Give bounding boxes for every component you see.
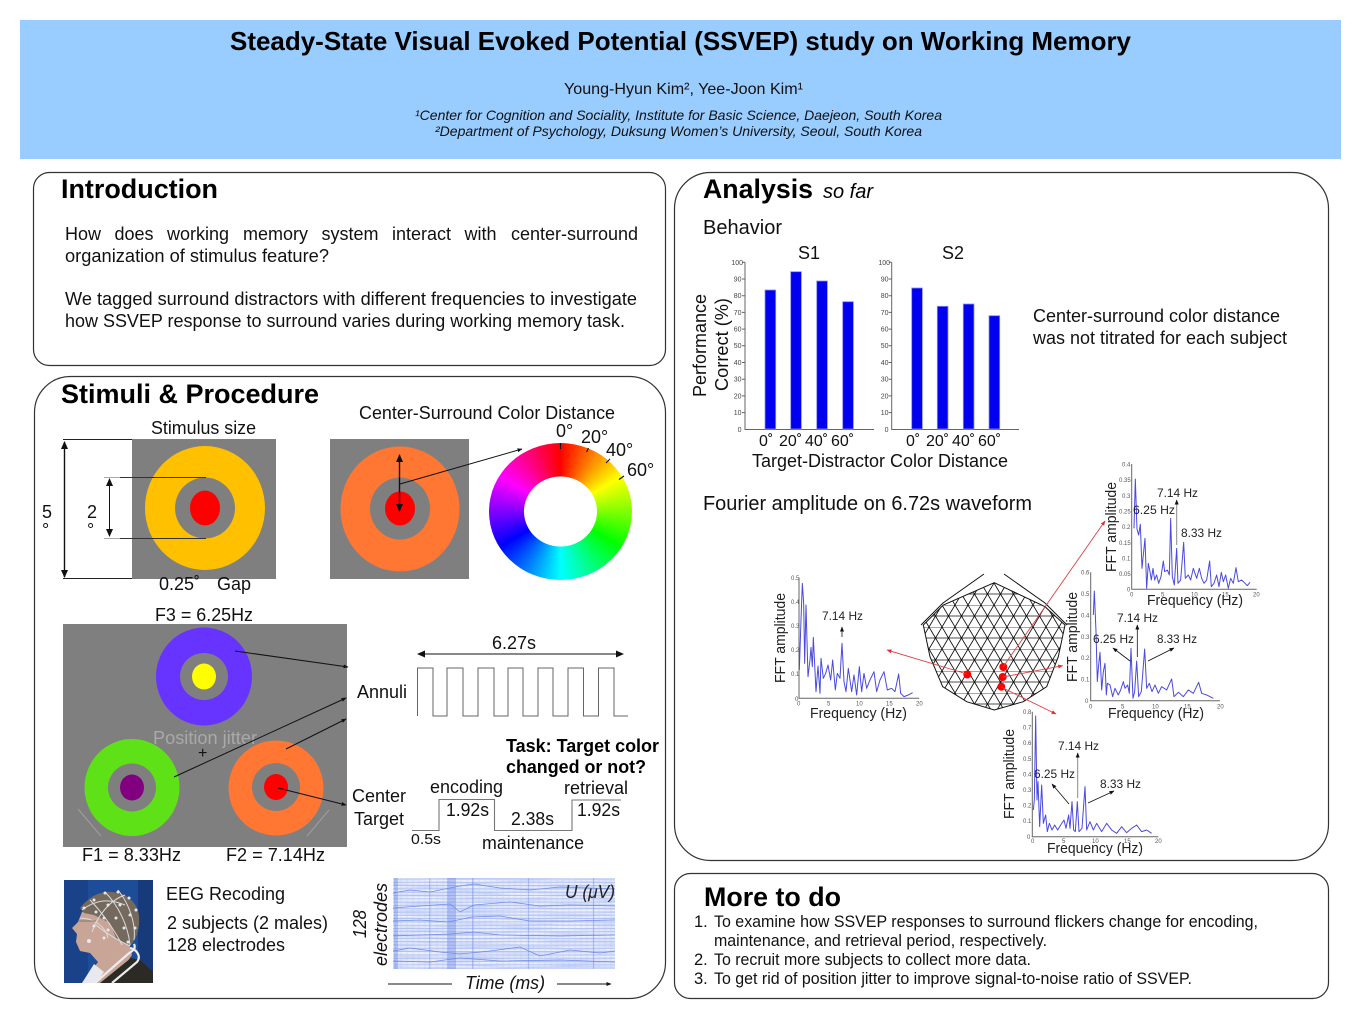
- stimulus size diagram: °: [42, 520, 49, 540]
- chart: FFT right electrode: 8.33 Hz: [1157, 632, 1197, 646]
- bar chart: S1: 0: [738, 427, 742, 434]
- stimulus size diagram: Gap: [217, 574, 251, 594]
- bar chart: S2: S2: [942, 243, 964, 263]
- annuli flicker timing: Annuli: [357, 682, 407, 702]
- chart: FFT lower right electrode: 5: [1062, 839, 1066, 845]
- bar chart: S2: 10: [881, 410, 889, 417]
- chart: FFT upper right electrode: 15: [1222, 592, 1229, 598]
- chart: FFT lower right electrode: 0.5: [1023, 757, 1032, 763]
- chart: FFT right electrode: 0: [1085, 699, 1089, 705]
- three-stimulus display: +: [198, 745, 207, 762]
- chart: FFT right electrode: 0.5: [1081, 592, 1090, 598]
- intro method line 2: how SSVEP response to surround varies during working memory task.: [65, 311, 625, 331]
- three-stimulus display: [63, 605, 348, 865]
- heading: introduction: Introduction: [61, 174, 218, 204]
- behavior note: was not titrated for each subject: [1032, 328, 1287, 348]
- chart: FFT lower right electrode: 0: [1031, 839, 1035, 845]
- EEG traces chart: U (μV): [565, 882, 615, 902]
- photo: participant wearing EEG net: [64, 880, 153, 983]
- panel: analysis: [674, 172, 1328, 860]
- annuli flicker timing: 6.27s: [492, 633, 536, 653]
- authors: Young-Hyun Kim², Yee-Joon Kim¹: [564, 81, 803, 98]
- chart: FFT upper right electrode: FFT amplitude: [1104, 482, 1120, 572]
- chart: FFT lower right electrode: 0: [1027, 835, 1031, 841]
- bar chart: S1: 20: [734, 394, 742, 400]
- panel: more to do: [674, 874, 1328, 998]
- task question: changed or not?: [506, 757, 646, 777]
- chart: FFT lower right electrode: 0.8: [1023, 710, 1032, 716]
- y-axis label: performance: Correct (%): [712, 298, 732, 391]
- numbered list: maintenance, and retrieval period, respectively.: [714, 932, 1047, 950]
- chart: FFT upper right electrode: 8.33 Hz: [1181, 526, 1222, 540]
- stimulus size diagram: 2: [87, 502, 97, 522]
- chart: FFT left electrode: 7.14 Hz: [822, 609, 863, 623]
- bar chart: S1: 30: [734, 376, 742, 384]
- y-axis label: performance: Performance: [690, 294, 710, 397]
- bar chart: S1: 80: [734, 293, 742, 300]
- chart: FFT lower right electrode: [1002, 710, 1162, 857]
- intro question text: system: [322, 224, 379, 244]
- center-surround colour distance stimulus: [330, 403, 615, 579]
- chart: FFT left electrode: 0: [797, 702, 801, 708]
- center target timing: Center: [352, 786, 406, 806]
- bar chart: S2: 20: [881, 394, 889, 400]
- chart: FFT right electrode: FFT amplitude: [1065, 592, 1081, 682]
- bar chart: S1: 100: [731, 260, 743, 267]
- bar chart: S2: 60: [881, 326, 889, 334]
- chart: FFT right electrode: 20: [1217, 704, 1224, 710]
- bar chart: S2: 80: [881, 293, 889, 300]
- center target timing: Target: [354, 809, 404, 829]
- intro question second line: organization of stimulus feature?: [65, 246, 329, 266]
- chart: FFT right electrode: 0.3: [1081, 635, 1090, 641]
- bar chart: S2: 50: [881, 343, 889, 350]
- bar chart: S1: [731, 243, 874, 450]
- electrode head map: [887, 521, 1105, 714]
- chart: FFT left electrode: 0.5: [791, 576, 800, 582]
- center target timing: maintenance: [482, 833, 584, 853]
- bar chart: S1: 40˚: [805, 433, 828, 450]
- chart: FFT right electrode: 15: [1184, 704, 1191, 710]
- chart: FFT left electrode: 5: [827, 702, 831, 708]
- chart: FFT lower right electrode: 15: [1124, 839, 1131, 845]
- chart: FFT upper right electrode: 0: [1127, 588, 1131, 594]
- bar chart: S1: 70: [734, 310, 742, 317]
- task question: Task: Target color: [506, 736, 659, 756]
- panel: stimuli and procedure: [34, 376, 666, 998]
- EEG recording text: EEG Recoding: [166, 884, 285, 904]
- chart: FFT lower right electrode: 6.25 Hz: [1034, 767, 1075, 781]
- affiliation 1: ¹Center for Cognition and Sociality, Institute for Basic Science, Daejeon, South Korea: [415, 107, 942, 123]
- chart: FFT lower right electrode: 8.33 Hz: [1100, 777, 1141, 791]
- chart: FFT left electrode: 0.2: [791, 648, 800, 654]
- chart: FFT upper right electrode: 0.4: [1122, 462, 1131, 468]
- EEG traces chart: 128: [350, 910, 370, 938]
- center-surround colour distance stimulus: Center-Surround Color Distance: [359, 403, 615, 423]
- bar chart: S2: 30: [881, 376, 889, 384]
- numbered list: [694, 913, 1258, 988]
- intro question text: with: [464, 224, 497, 244]
- chart: FFT upper right electrode: 0.25: [1119, 510, 1131, 516]
- bar chart: S2: 100: [878, 260, 890, 267]
- numbered list: 1.: [694, 913, 708, 931]
- chart: FFT upper right electrode: 0.35: [1119, 478, 1131, 484]
- x-axis label: colour distance: Target-Distractor Color Distance: [752, 451, 1008, 471]
- center target timing: 0.5s: [411, 831, 441, 848]
- chart: FFT right electrode: 6.25 Hz: [1093, 632, 1134, 646]
- chart: FFT upper right electrode: 0.2: [1122, 525, 1131, 531]
- header banner: [20, 20, 1341, 159]
- chart: FFT right electrode: 10: [1152, 704, 1159, 710]
- numbered list: 2.: [694, 951, 708, 969]
- chart: FFT lower right electrode: 7.14 Hz: [1058, 739, 1099, 753]
- bar chart: S1: 10: [734, 410, 742, 417]
- chart: FFT left electrode: 20: [916, 702, 923, 708]
- chart: FFT right electrode: 0: [1089, 704, 1093, 710]
- chart: FFT upper right electrode: 0.1: [1122, 556, 1131, 562]
- stimulus F1: [84, 739, 180, 836]
- chart: FFT right electrode: 0.1: [1081, 678, 1090, 684]
- center target timing: [352, 777, 628, 853]
- bar chart: S2: 60˚: [978, 433, 1001, 450]
- bar chart: S1: 60: [734, 326, 742, 334]
- intro question text: center-surround: [511, 224, 638, 244]
- task question: [506, 736, 659, 777]
- chart: FFT upper right electrode: 10: [1191, 592, 1198, 598]
- bar chart: S1: 40: [734, 360, 742, 367]
- three-stimulus display: F1 = 8.33Hz: [82, 845, 181, 865]
- chart: FFT lower right electrode: 0.1: [1023, 819, 1032, 825]
- bar chart: S2: [878, 243, 1019, 450]
- bar chart: S1: S1: [798, 243, 820, 263]
- chart: FFT right electrode: [1065, 570, 1224, 722]
- y-axis label: performance: [690, 294, 732, 397]
- bar chart: S2: 90: [881, 276, 889, 284]
- chart: FFT lower right electrode: 0.6: [1023, 741, 1032, 747]
- chart: FFT right electrode: 0.4: [1081, 614, 1090, 620]
- EEG traces chart: Time (ms): [465, 973, 545, 993]
- three-stimulus display: F3 = 6.25Hz: [155, 605, 253, 625]
- bar chart: S2: 40: [881, 360, 889, 367]
- chart: FFT right electrode: 0.6: [1081, 570, 1090, 576]
- chart: FFT left electrode: 10: [856, 702, 863, 708]
- stimulus size diagram: °: [87, 520, 94, 540]
- chart: FFT left electrode: [773, 576, 923, 722]
- chart: FFT upper right electrode: 0.3: [1122, 494, 1131, 500]
- center target timing: retrieval: [564, 778, 628, 798]
- colour wheel: 60°: [627, 460, 654, 480]
- numbered list: 3.: [694, 970, 708, 988]
- chart: FFT lower right electrode: 0.4: [1023, 772, 1032, 778]
- chart: FFT left electrode: 15: [886, 702, 893, 708]
- stimulus size diagram: 5: [42, 502, 52, 522]
- chart: FFT upper right electrode: [1104, 462, 1260, 609]
- colour wheel: 40°: [606, 440, 633, 460]
- EEG recording text: 2 subjects (2 males): [167, 913, 328, 933]
- intro method line 1: We tagged surround distractors with different frequencies to investigate: [65, 289, 637, 309]
- three-stimulus display: F2 = 7.14Hz: [226, 845, 325, 865]
- EEG traces chart: [350, 878, 615, 993]
- behavior note: [1032, 306, 1287, 348]
- behavior note: Center-surround color distance: [1033, 306, 1280, 326]
- numbered list: To examine how SSVEP responses to surround flickers change for encoding,: [714, 913, 1258, 931]
- chart: FFT left electrode: 0.4: [791, 600, 800, 606]
- intro question text: working: [166, 224, 229, 244]
- chart: FFT lower right electrode: 20: [1155, 839, 1162, 845]
- chart: FFT left electrode: 0: [795, 697, 799, 703]
- intro question text: How: [65, 224, 102, 244]
- center target timing: 1.92s: [577, 800, 620, 820]
- heading: analysis so far: so far: [823, 181, 874, 203]
- intro question text: does: [114, 224, 154, 244]
- stimulus size diagram: Stimulus size: [151, 418, 256, 438]
- intro question text: memory: [243, 224, 308, 244]
- bar chart: S1: 50: [734, 343, 742, 350]
- bar chart: S1: 60˚: [831, 433, 854, 450]
- chart: FFT lower right electrode: 10: [1092, 839, 1099, 845]
- bar chart: S1: 90: [734, 276, 742, 284]
- stimulus size diagram: [42, 418, 276, 594]
- numbered list: To recruit more subjects to collect more data.: [714, 951, 1031, 969]
- annuli flicker timing: [357, 633, 628, 716]
- chart: FFT left electrode: Frequency (Hz): [810, 706, 907, 722]
- chart: FFT right electrode: 0.2: [1081, 656, 1090, 662]
- chart: FFT lower right electrode: FFT amplitude: [1002, 729, 1018, 819]
- title: Steady-State Visual Evoked Potential (SSVEP) study on Working Memory: [230, 26, 1132, 56]
- chart: FFT left electrode: FFT amplitude: [773, 593, 789, 683]
- bar chart: S2: 70: [881, 310, 889, 317]
- bar chart: S2: 0˚: [906, 433, 920, 450]
- subheading: behavior: Behavior: [703, 217, 782, 239]
- intro question text: interact: [392, 224, 451, 244]
- center target timing: encoding: [430, 777, 503, 797]
- heading: more to do: More to do: [704, 882, 841, 912]
- chart: FFT lower right electrode: 0.3: [1023, 788, 1032, 794]
- EEG traces chart: electrodes: [371, 883, 391, 966]
- chart: FFT upper right electrode: 5: [1161, 592, 1165, 598]
- stimulus size diagram: 0.25˚: [159, 574, 200, 594]
- chart: FFT right electrode: 7.14 Hz: [1117, 611, 1158, 625]
- chart: FFT lower right electrode: 0.2: [1023, 804, 1032, 810]
- EEG recording text: [166, 884, 328, 955]
- heading: stimuli and procedure: Stimuli & Procedure: [61, 379, 319, 409]
- chart: FFT lower right electrode: 0.7: [1023, 726, 1032, 732]
- chart: FFT upper right electrode: 20: [1253, 592, 1260, 598]
- chart: FFT right electrode: 5: [1121, 704, 1125, 710]
- bar chart: S2: 0: [885, 427, 889, 434]
- stimulus F2: [228, 740, 324, 836]
- bar chart: S2: 40˚: [952, 433, 975, 450]
- affiliation 2: ²Department of Psychology, Duksung Women’s University, Seoul, South Korea: [435, 123, 922, 139]
- chart: FFT upper right electrode: 0: [1130, 592, 1134, 598]
- bar chart: S1: 0˚: [759, 433, 773, 450]
- chart: FFT upper right electrode: 0.15: [1119, 541, 1131, 547]
- EEG recording text: 128 electrodes: [167, 935, 285, 955]
- chart: FFT upper right electrode: Frequency (Hz): [1147, 593, 1243, 609]
- bar chart: S1: 20˚: [779, 433, 802, 450]
- chart: FFT left electrode: 0.1: [791, 672, 800, 678]
- center target timing: 1.92s: [446, 800, 489, 820]
- panel: introduction: [34, 172, 666, 366]
- three-stimulus display: Position jitter: [153, 728, 257, 748]
- subheading: fourier amplitude: Fourier amplitude on 6.72s waveform: [703, 493, 1032, 515]
- colour wheel: 0°: [556, 421, 573, 441]
- chart: FFT upper right electrode: 0.05: [1119, 572, 1131, 578]
- chart: FFT upper right electrode: 7.14 Hz: [1157, 486, 1198, 500]
- colour wheel: [489, 421, 654, 580]
- colour wheel: 20°: [581, 427, 608, 447]
- chart: FFT lower right electrode: Frequency (Hz): [1047, 841, 1143, 857]
- chart: FFT left electrode: 0.3: [791, 624, 800, 630]
- heading: analysis so far: Analysis: [703, 174, 813, 204]
- stimulus F3: [156, 628, 252, 726]
- numbered list: To get rid of position jitter to improve signal-to-noise ratio of SSVEP.: [714, 970, 1192, 988]
- chart: FFT right electrode: Frequency (Hz): [1108, 706, 1204, 722]
- bar chart: S2: 20˚: [926, 433, 949, 450]
- center target timing: 2.38s: [511, 809, 554, 829]
- chart: FFT upper right electrode: 6.25 Hz: [1133, 503, 1175, 517]
